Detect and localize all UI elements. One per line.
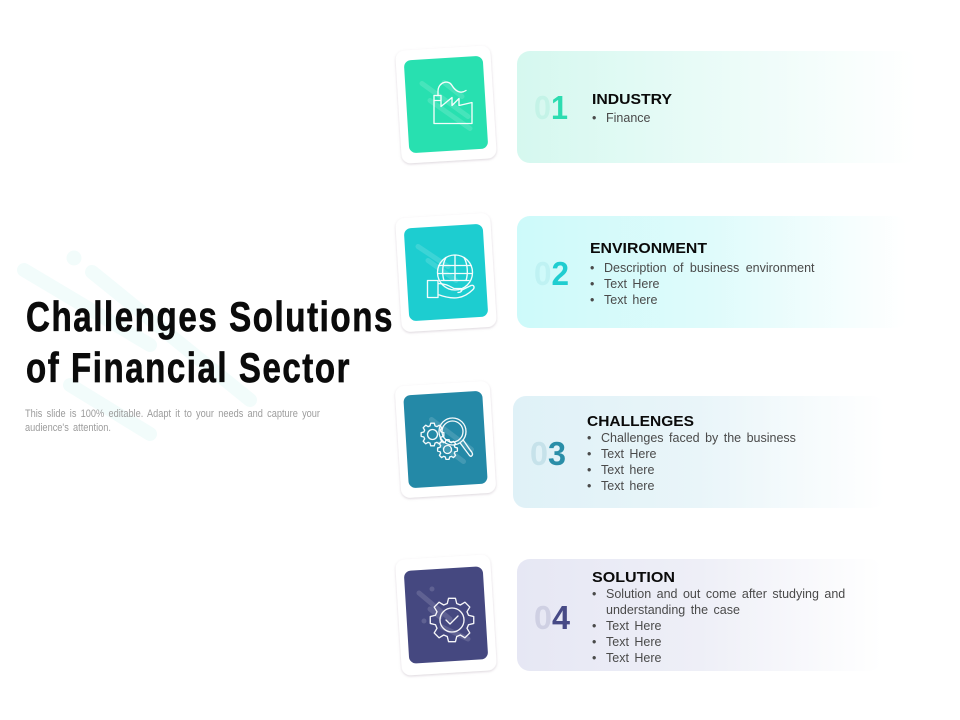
icon: globe on hand xyxy=(418,246,474,298)
bullet list: solution: Text Here xyxy=(606,635,662,649)
bullet list: challenges: Challenges faced by the business xyxy=(601,431,796,445)
bullet list: solution: • xyxy=(592,651,596,665)
bullet list: challenges: Text here xyxy=(601,463,654,477)
icon: factory xyxy=(422,82,472,128)
description text: This slide is 100% editable. Adapt it to your needs and capture your xyxy=(25,408,320,420)
title: Challenges Solutions xyxy=(26,293,394,340)
description text xyxy=(25,408,320,434)
bullet list: solution xyxy=(592,587,845,665)
icon card: industry xyxy=(395,45,497,164)
heading: environment: ENVIRONMENT xyxy=(590,240,707,257)
icon: gears and magnifier xyxy=(421,418,472,462)
number 01: 01 xyxy=(534,89,568,126)
panel: environment xyxy=(517,216,907,328)
bullet list: challenges xyxy=(587,431,796,493)
bullet list: solution: Text Here xyxy=(606,651,662,665)
bullet list: solution: • xyxy=(592,635,596,649)
bullet list: solution: understanding the case xyxy=(606,603,740,617)
panel: solution xyxy=(517,559,882,671)
bullet list: solution: • xyxy=(592,587,596,601)
icon: gear with check xyxy=(419,589,474,642)
title xyxy=(26,293,394,391)
bullet list: industry: Finance xyxy=(606,111,651,125)
number 03: 03 xyxy=(530,435,566,472)
heading: industry: INDUSTRY xyxy=(592,91,672,108)
bullet list: environment xyxy=(590,261,815,307)
icon card: challenges xyxy=(395,381,496,498)
bullet list: solution: Text Here xyxy=(606,619,662,633)
bullet list: environment: Description of business environment xyxy=(604,261,815,275)
bullet list: challenges: • xyxy=(587,431,591,445)
bullet list: solution: Solution and out come after studying and xyxy=(606,587,845,601)
bullet list: challenges: • xyxy=(587,479,591,493)
description text: audience's attention. xyxy=(25,422,111,434)
decorative background streaks behind title xyxy=(24,258,250,434)
bullet list: challenges: • xyxy=(587,463,591,477)
bullet list: environment: Text Here xyxy=(604,277,660,291)
bullet list: solution: • xyxy=(592,619,596,633)
number 02: 02 xyxy=(534,255,569,292)
panel: industry xyxy=(517,51,917,163)
panel: challenges xyxy=(513,396,885,508)
bullet list: challenges: Text here xyxy=(601,479,654,493)
bullet list: environment: Text here xyxy=(604,293,657,307)
bullet list: challenges: • xyxy=(587,447,591,461)
bullet list: industry: • xyxy=(592,111,596,125)
bullet list: environment: • xyxy=(590,293,594,307)
heading: solution: SOLUTION xyxy=(592,569,675,586)
bullet list: environment: • xyxy=(590,261,594,275)
icon card: environment xyxy=(395,213,497,332)
icon card: solution xyxy=(395,554,497,676)
bullet list: challenges: Text Here xyxy=(601,447,657,461)
title: of Financial Sector xyxy=(26,344,351,391)
number 04: 04 xyxy=(534,599,571,636)
heading: challenges: CHALLENGES xyxy=(587,413,694,430)
bullet list: environment: • xyxy=(590,277,594,291)
